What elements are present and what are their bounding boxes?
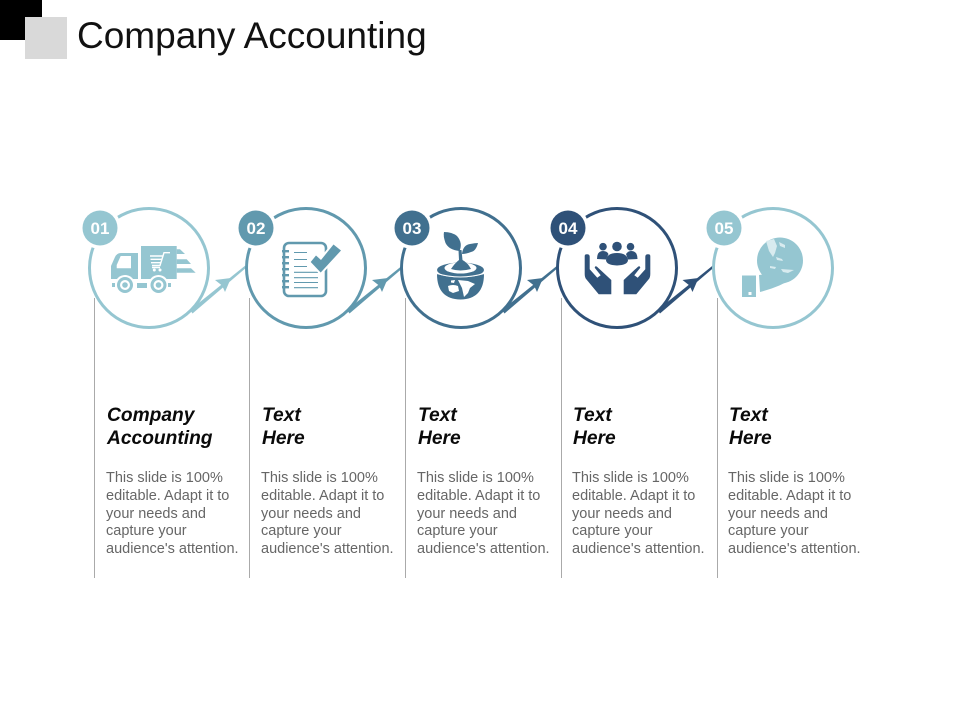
column 5 heading: Here bbox=[729, 428, 772, 449]
column 4 text: editable. Adapt it to bbox=[572, 488, 695, 504]
column 3 text: audience's attention. bbox=[417, 541, 550, 557]
column 1 text bbox=[106, 470, 239, 557]
column 5 heading bbox=[729, 405, 772, 449]
step 2: circle with checklist icon: 02 bbox=[247, 219, 265, 238]
column 1 heading: Accounting bbox=[107, 428, 213, 449]
title: Company Accounting bbox=[77, 15, 427, 56]
column 5 text: capture your bbox=[728, 523, 809, 539]
step 4: circle with hands and people icon: 04 bbox=[559, 219, 578, 238]
column 1 text: editable. Adapt it to bbox=[106, 488, 229, 504]
arrow bbox=[658, 266, 713, 314]
arrow bbox=[502, 266, 558, 314]
column 3 heading: Text bbox=[418, 405, 457, 426]
column 2 heading: Text bbox=[262, 405, 301, 426]
column 3 text: your needs and bbox=[417, 506, 517, 522]
step 1: circle with truck icon bbox=[79, 207, 246, 578]
step 1: circle with truck icon: 01 bbox=[91, 219, 109, 238]
icon: notebook with check bbox=[282, 243, 341, 296]
column 2 heading bbox=[262, 405, 305, 449]
column 4 heading: Here bbox=[573, 428, 616, 449]
column 5 text: This slide is 100% bbox=[728, 470, 845, 486]
column 4 text: capture your bbox=[572, 523, 653, 539]
arrow bbox=[347, 266, 403, 314]
column 4 heading bbox=[573, 405, 616, 449]
column 4 text: This slide is 100% bbox=[572, 470, 689, 486]
column 5 text: editable. Adapt it to bbox=[728, 488, 851, 504]
column 5 text bbox=[728, 470, 861, 557]
column 3 heading: Here bbox=[418, 428, 461, 449]
column 2 text: your needs and bbox=[261, 506, 361, 522]
step 3: circle with plant globe icon: 03 bbox=[403, 219, 421, 238]
icon: people in hands bbox=[585, 242, 650, 294]
column 2 heading: Here bbox=[262, 428, 305, 449]
column 2 text: capture your bbox=[261, 523, 342, 539]
column 5 text: audience's attention. bbox=[728, 541, 861, 557]
column 5 text: your needs and bbox=[728, 506, 828, 522]
header squares bbox=[0, 0, 67, 59]
column 1 heading: Company bbox=[107, 405, 194, 426]
column 3 heading bbox=[418, 405, 461, 449]
column 1 text: capture your bbox=[106, 523, 187, 539]
column 5 heading: Text bbox=[729, 405, 768, 426]
column 1 text: audience's attention. bbox=[106, 541, 239, 557]
column 2 text bbox=[261, 470, 394, 557]
column 4 text bbox=[572, 470, 705, 557]
column 3 text: This slide is 100% bbox=[417, 470, 534, 486]
column 4 text: audience's attention. bbox=[572, 541, 705, 557]
step 4: circle with hands and people icon bbox=[547, 207, 713, 578]
step 5: circle with globe in hand icon bbox=[703, 207, 832, 578]
column 3 text: editable. Adapt it to bbox=[417, 488, 540, 504]
column 1 text: This slide is 100% bbox=[106, 470, 223, 486]
arrow bbox=[190, 266, 246, 314]
column 2 text: audience's attention. bbox=[261, 541, 394, 557]
step 3: circle with plant globe icon bbox=[391, 207, 558, 578]
column 3 text bbox=[417, 470, 550, 557]
column 4 heading: Text bbox=[573, 405, 612, 426]
icon: globe held by hand bbox=[742, 238, 803, 297]
column 4 text: your needs and bbox=[572, 506, 672, 522]
icon: plant in globe bbox=[437, 232, 484, 300]
icon: truck with cart bbox=[111, 246, 196, 295]
step 2: circle with checklist icon bbox=[235, 207, 403, 578]
column 3 text: capture your bbox=[417, 523, 498, 539]
column 1 text: your needs and bbox=[106, 506, 206, 522]
column 2 text: This slide is 100% bbox=[261, 470, 378, 486]
column 2 text: editable. Adapt it to bbox=[261, 488, 384, 504]
step 5: circle with globe in hand icon: 05 bbox=[715, 219, 733, 238]
column 1 heading bbox=[106, 405, 213, 449]
